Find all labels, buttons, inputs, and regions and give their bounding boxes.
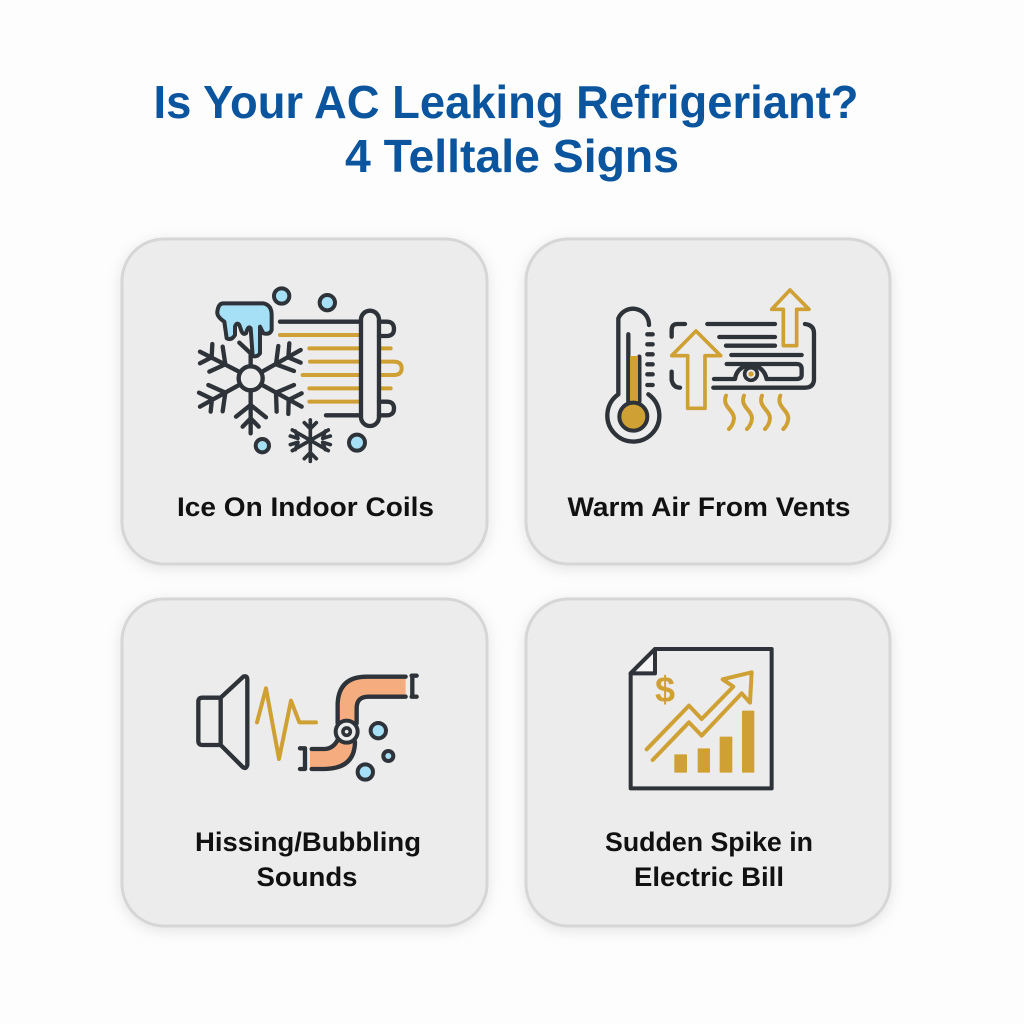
label: Sudden Spike in: [605, 827, 813, 857]
icon: speaker and leaking pipe: [198, 676, 417, 780]
icon: bill with rising chart: [631, 649, 772, 788]
title: [154, 76, 858, 182]
panel: sudden spike in electric bill: [526, 599, 890, 926]
label: Sounds: [256, 862, 358, 892]
icon: bill with rising chart: $: [655, 669, 675, 710]
label: [195, 827, 421, 892]
label: Warm Air From Vents: [568, 492, 850, 522]
label: Electric Bill: [634, 862, 784, 892]
panel: ice on indoor coils: [122, 239, 487, 564]
icon: thermometer and air conditioner: [607, 290, 814, 442]
label: Ice On Indoor Coils: [177, 492, 434, 522]
icon: frozen coil with snowflakes: [199, 288, 402, 461]
title: 4 Telltale Signs: [345, 130, 679, 182]
panel: hissing and bubbling sounds: [122, 599, 487, 926]
label: [605, 827, 813, 892]
title: Is Your AC Leaking Refrigeriant?: [154, 76, 858, 128]
panel: warm air from vents: [526, 239, 890, 564]
label: Hissing/Bubbling: [195, 827, 421, 857]
